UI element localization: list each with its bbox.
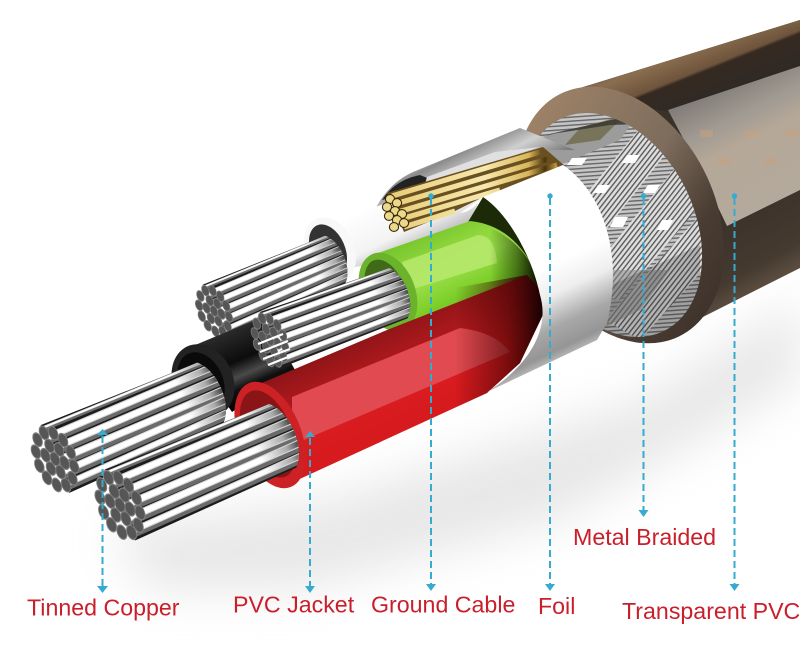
soft cable shadow — [110, 300, 800, 590]
green wire jacket — [348, 197, 545, 340]
red wire jacket — [220, 275, 550, 499]
white wire copper strands — [187, 229, 357, 344]
pointer: transparent PVC — [730, 193, 740, 591]
label: transparent PVC: Transparent PVC — [622, 598, 800, 624]
label: PVC jacket: PVC Jacket — [233, 592, 355, 618]
foil back sleeve — [375, 128, 575, 210]
label: tinned copper: Tinned Copper — [27, 594, 180, 620]
label: ground cable: Ground Cable — [371, 592, 515, 618]
gold ground cable — [382, 147, 565, 232]
label: foil: Foil — [538, 593, 575, 619]
pointer: foil — [545, 193, 555, 591]
pointer: metal braided — [638, 193, 648, 517]
label: metal braided: Metal Braided — [573, 524, 716, 550]
pointer: tinned copper — [97, 429, 108, 593]
metal braided shield — [540, 113, 702, 337]
green wire copper strands — [244, 261, 420, 374]
black wire jacket — [160, 316, 295, 428]
pointer: ground cable — [426, 193, 436, 591]
red wire copper strands — [84, 394, 312, 549]
black wire copper strands — [21, 353, 239, 501]
white wire jacket — [294, 198, 480, 291]
foil shield — [460, 165, 613, 392]
transparent PVC jacket — [475, 20, 800, 378]
pointer: PVC jacket — [305, 431, 315, 593]
